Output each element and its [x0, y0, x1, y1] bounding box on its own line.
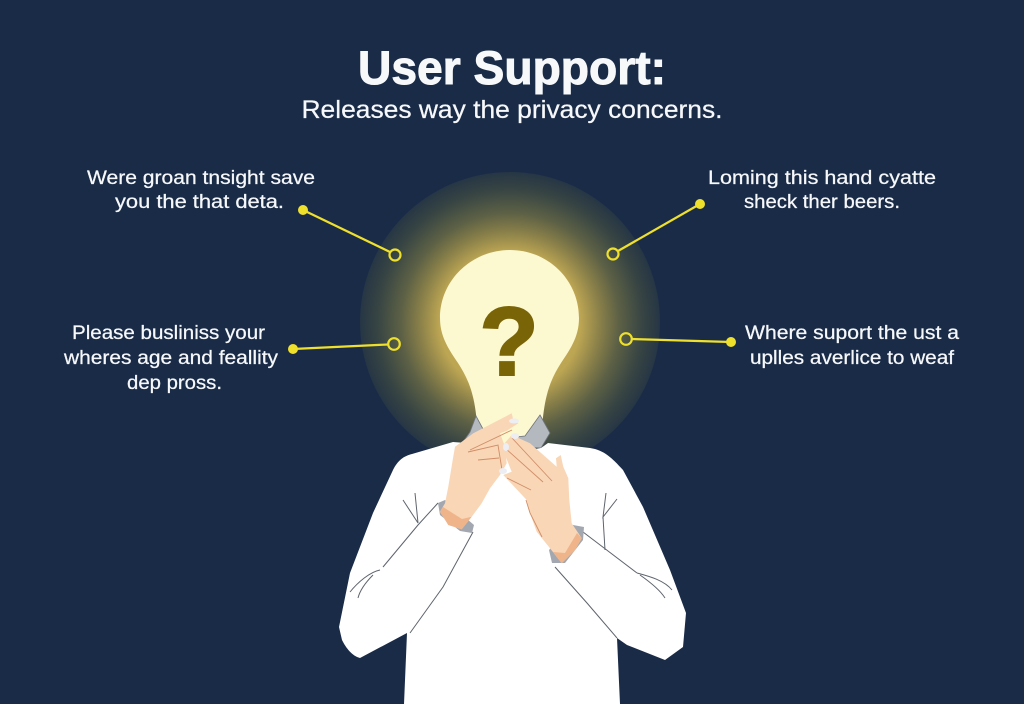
text block: upper right callout: sheck ther beers.	[744, 191, 900, 213]
text block: upper left callout	[87, 167, 315, 213]
left cuff	[438, 500, 474, 533]
connector: upper left	[298, 205, 400, 260]
subtitle: Releases way the privacy concerns.	[302, 96, 722, 124]
connector: lower right	[620, 333, 736, 347]
text block: lower right callout: uplles averlice to weaf	[750, 347, 955, 369]
left wrist shading	[440, 507, 472, 529]
fingernails	[499, 418, 519, 474]
connector: lower left	[288, 338, 400, 354]
left hand	[440, 413, 518, 529]
text block: lower left callout: wheres age and feallity	[63, 347, 278, 369]
shirt body	[339, 442, 686, 704]
connector: upper right	[608, 199, 705, 260]
text block: upper left callout: you the that deta.	[115, 191, 284, 213]
glow behind bulb	[360, 172, 660, 472]
text block: lower left callout: Please busliniss your	[72, 322, 266, 344]
text block: lower left callout: dep pross.	[127, 372, 222, 394]
right hand	[502, 435, 582, 563]
text block: upper right callout: Loming this hand cyatte	[708, 167, 936, 189]
title: User Support:	[358, 41, 666, 94]
collar	[463, 415, 550, 448]
question mark: ?	[479, 287, 539, 396]
right cuff	[549, 525, 584, 563]
text block: lower left callout	[63, 322, 278, 394]
text block: lower right callout	[745, 322, 959, 369]
text block: upper left callout: Were groan tnsight save	[87, 167, 315, 189]
text block: upper right callout	[708, 167, 936, 213]
icon: lightbulb head	[440, 250, 579, 445]
shirt fold lines	[350, 493, 672, 638]
finger lines	[468, 430, 552, 537]
text block: lower right callout: Where suport the ust a	[745, 322, 959, 344]
right wrist shading	[553, 533, 582, 563]
figure: person with lightbulb head	[339, 250, 686, 704]
